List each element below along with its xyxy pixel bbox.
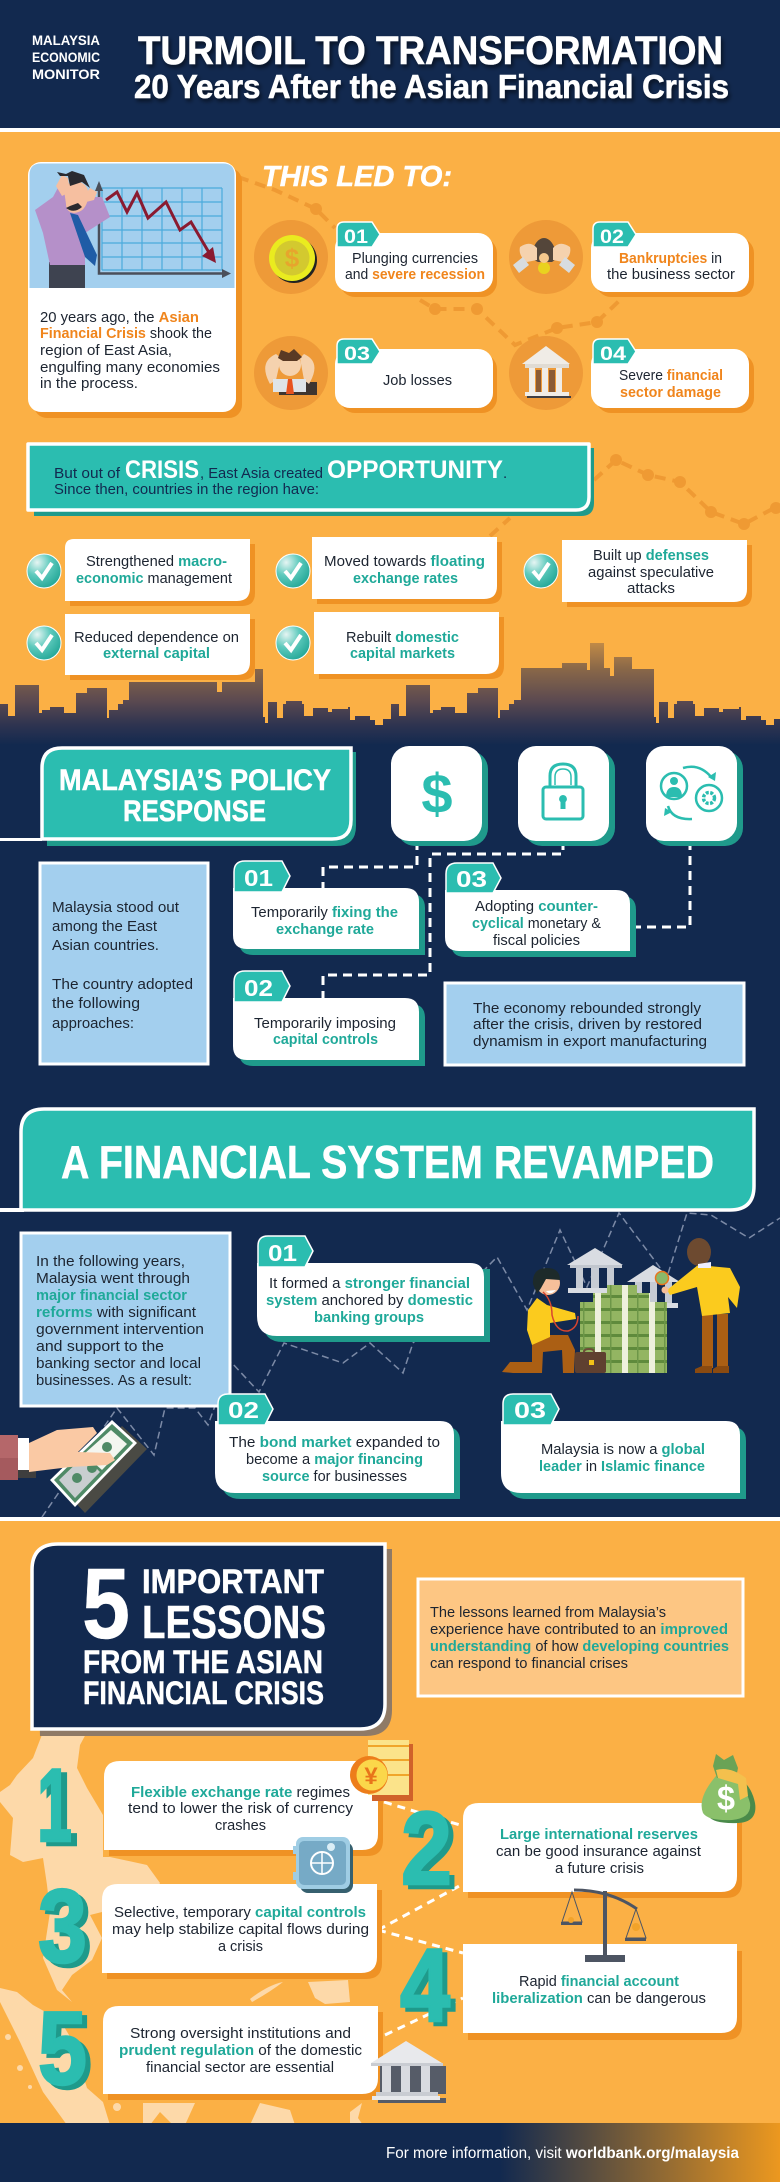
- header brand: Malaysia Economic Monitor: ECONOMIC: [32, 49, 100, 65]
- icon: yen coin and stacks: [350, 1740, 413, 1801]
- card 04: financial sector damage: sector damage: [620, 384, 721, 401]
- reforms blue box: [21, 1233, 230, 1406]
- tag 04: 04: [600, 344, 627, 365]
- intro blue box: Asian countries.: [52, 937, 159, 954]
- card 01: plunging currencies: [335, 222, 497, 297]
- reforms blue box: and support to the: [36, 1338, 164, 1355]
- lesson card 2: a future crisis: [555, 1860, 644, 1877]
- icon: safe: [293, 1837, 353, 1893]
- lesson card 3: Selective, temporary capital controls: [114, 1904, 366, 1921]
- card 01: stronger financial system: system anchored by domestic: [266, 1292, 473, 1309]
- icon: check: [27, 554, 61, 588]
- lesson card 5: [103, 2006, 383, 2100]
- standing banker: [656, 1238, 740, 1373]
- check card: floating exchange rates: [276, 537, 502, 604]
- card 02: bankruptcies: the business sector: [607, 266, 735, 283]
- icon: falling coin: $: [285, 243, 300, 273]
- reforms blue box: banking sector and local: [36, 1355, 201, 1372]
- heading: this led to: THIS LED TO:: [262, 161, 452, 193]
- card 02: bond market: The bond market expanded to: [229, 1434, 440, 1451]
- icon card: dollar: $: [421, 762, 453, 825]
- tag 02: [218, 1394, 273, 1425]
- card 04: financial sector damage: Severe financial: [619, 367, 723, 384]
- rebound blue box: dynamism in export manufacturing: [473, 1033, 707, 1050]
- reforms blue box: Malaysia went through: [36, 1270, 190, 1287]
- reforms blue box: In the following years,: [36, 1253, 185, 1270]
- icon: bank building: [371, 2041, 446, 2103]
- policy card 01: exchange rate: [276, 921, 374, 938]
- numeral 2: 2: [406, 1795, 457, 1911]
- intro blue box: the following: [52, 995, 140, 1012]
- header brand: Malaysia Economic Monitor: MONITOR: [32, 66, 100, 82]
- card 04: financial sector damage: [591, 339, 754, 413]
- policy card 02: capital controls: [273, 1031, 378, 1048]
- check card: defenses: [524, 540, 752, 607]
- panel text: [40, 309, 220, 392]
- check card: external capital: Reduced dependence on: [74, 629, 239, 646]
- card 01: stronger financial system: It formed a stronger financial: [269, 1275, 470, 1292]
- icon: check: [276, 626, 310, 660]
- icon: yen coin and stacks: ¥: [364, 1763, 378, 1790]
- heading: 5 important lessons: 5: [82, 1548, 130, 1660]
- tag 02: 02: [600, 227, 624, 248]
- connector dashes: [323, 841, 690, 998]
- card 01: plunging currencies: and severe recession: [345, 266, 485, 283]
- check card: macroeconomic management: economic management: [76, 570, 233, 587]
- intro blue box: among the East: [52, 918, 158, 935]
- title: [134, 29, 729, 105]
- card 02: bond market: become a major financing: [246, 1451, 423, 1468]
- heading: 5 important lessons: IMPORTANT: [142, 1563, 324, 1601]
- intro blue box: approaches:: [52, 1015, 134, 1032]
- check card: domestic capital markets: [276, 612, 504, 679]
- card 01: stronger financial system: [257, 1236, 490, 1342]
- check card: floating exchange rates: Moved towards floating: [324, 553, 485, 570]
- numeral 1: 1: [43, 1752, 78, 1868]
- intro blue box: [40, 863, 208, 1064]
- policy card 03: [445, 863, 636, 957]
- icon: check: [27, 626, 61, 660]
- card 03: job losses: [335, 339, 497, 413]
- kneeling banker: [502, 1268, 578, 1373]
- man: [49, 262, 85, 288]
- lessons intro box: The lessons learned from Malaysia’s: [430, 1604, 666, 1621]
- illustration: falling chart with worried man: [35, 171, 231, 288]
- icon: money bag: [702, 1754, 755, 1823]
- banner: crisis to opportunity: OPPORTUNITY: [327, 456, 503, 484]
- header band: [0, 0, 780, 128]
- card 02: bond market: [215, 1394, 460, 1499]
- check card: floating exchange rates: exchange rates: [353, 570, 458, 587]
- tag 04: [593, 339, 636, 365]
- briefcase: [575, 1349, 606, 1373]
- illustration: bankers examining money stack: [502, 1238, 740, 1373]
- lesson card 3: may help stabilize capital flows during: [112, 1921, 369, 1938]
- policy response heading: RESPONSE: [123, 795, 266, 828]
- check card: domestic capital markets: capital markets: [350, 645, 455, 662]
- tag 03: 03: [344, 344, 370, 365]
- lesson card 1: [104, 1761, 383, 1856]
- title: 20 Years After the Asian Financial Crisis: [134, 68, 729, 105]
- reforms blue box: reforms with significant: [36, 1304, 197, 1321]
- reforms blue box: businesses. As a result:: [36, 1372, 192, 1389]
- tag 02: 02: [244, 975, 273, 1001]
- orange background top section: [0, 132, 780, 745]
- lesson card 4: Rapid financial account: [519, 1973, 679, 1990]
- panel: crisis intro: [28, 162, 242, 418]
- icon: cracked bank: [509, 336, 583, 410]
- icon: stressed worker: [254, 336, 328, 410]
- lesson card 3: a crisis: [218, 1938, 263, 1955]
- lesson card 5: financial sector are essential: [146, 2059, 334, 2076]
- numeral 5: 5: [43, 1995, 92, 2111]
- lesson card 3: [102, 1884, 382, 1979]
- tag 02: 02: [228, 1397, 259, 1423]
- tag 03: 03: [456, 866, 487, 892]
- numeral 5: 5: [38, 1991, 87, 2107]
- lesson card 2: [463, 1803, 742, 1898]
- heading: 5 important lessons: FINANCIAL CRISIS: [83, 1675, 324, 1711]
- numeral 4: 4: [405, 1932, 455, 2048]
- panel text: Financial Crisis shook the: [40, 325, 212, 342]
- numeral 3: 3: [38, 1869, 87, 1985]
- skyline silhouette: [0, 643, 780, 745]
- navy section background: [0, 745, 780, 1517]
- lesson card 2: can be good insurance against: [496, 1843, 702, 1860]
- tag 01: [337, 222, 380, 248]
- card 03: job losses: Job losses: [383, 372, 452, 389]
- lesson card 1: crashes: [215, 1817, 266, 1834]
- panel text: 20 years ago, the Asian: [40, 309, 199, 326]
- tag 01: 01: [268, 1240, 297, 1266]
- policy card 03: cyclical monetary &: [472, 915, 601, 932]
- panel text: engulfing many economies: [40, 359, 220, 376]
- tag 01: [234, 861, 290, 892]
- reforms blue box: government intervention: [36, 1321, 204, 1338]
- policy card 01: [233, 861, 425, 955]
- intro blue box: Malaysia stood out: [52, 899, 180, 916]
- lesson card 2: Large international reserves: [500, 1826, 698, 1843]
- banner: crisis to opportunity: CRISIS: [125, 456, 199, 484]
- tag 03: 03: [514, 1397, 546, 1423]
- icon card: padlock: [518, 746, 615, 846]
- decorative dashed trend line in orange: [238, 177, 780, 536]
- money stack: [580, 1285, 667, 1373]
- heading: 5 important lessons: LESSONS: [142, 1596, 326, 1648]
- connector dashes for lessons: [378, 1802, 463, 2035]
- card 03: Islamic finance: [501, 1394, 746, 1499]
- tag 01: [258, 1236, 313, 1267]
- policy response heading: [0, 748, 356, 846]
- lessons intro box: [418, 1579, 743, 1696]
- card 01: plunging currencies: Plunging currencies: [352, 250, 478, 267]
- rebound blue box: after the crisis, driven by restored: [473, 1016, 702, 1033]
- check card: external capital: external capital: [103, 645, 210, 662]
- check card: macroeconomic management: [27, 539, 255, 606]
- icon: falling coin: [254, 220, 328, 294]
- numeral 2: 2: [401, 1791, 452, 1907]
- small bank left: [567, 1248, 623, 1293]
- orange lessons background: [0, 1521, 780, 2123]
- header brand: Malaysia Economic Monitor: [32, 32, 100, 82]
- card 03: Islamic finance: leader in Islamic finance: [539, 1458, 705, 1475]
- lessons intro box: can respond to financial crises: [430, 1655, 628, 1672]
- icon: money bag: $: [717, 1780, 735, 1818]
- tag 01: 01: [344, 227, 368, 248]
- background dashed trend chart: [42, 1213, 780, 1517]
- banner: crisis to opportunity: [28, 444, 594, 516]
- numeral 3: 3: [43, 1873, 92, 1989]
- numeral 1: [37, 1748, 78, 1868]
- tag 01: 01: [244, 865, 273, 891]
- card 01: stronger financial system: banking groups: [314, 1309, 424, 1326]
- title: TURMOIL TO TRANSFORMATION: [138, 29, 723, 73]
- lesson card 1: Flexible exchange rate regimes: [131, 1784, 350, 1801]
- map of Malaysia region: [0, 1732, 363, 2125]
- card 02: bankruptcies: Bankruptcies in: [619, 250, 722, 267]
- card 02: bond market: source for businesses: [262, 1468, 407, 1485]
- lesson card 5: Strong oversight institutions and: [130, 2025, 351, 2042]
- check card: macroeconomic management: Strengthened macro-: [86, 553, 227, 570]
- intro blue box: The country adopted: [52, 976, 193, 993]
- tag 03: [503, 1394, 559, 1425]
- icon card: dollar: [391, 746, 488, 846]
- banner: crisis to opportunity: , East Asia created: [200, 465, 323, 482]
- check card: defenses: Built up defenses: [593, 547, 709, 564]
- banner: crisis to opportunity: .: [503, 465, 507, 482]
- policy response heading: MALAYSIA’S POLICY: [59, 764, 331, 797]
- footer: [0, 2123, 780, 2182]
- card 02: bankruptcies: [591, 222, 754, 297]
- icon: tilted scale: [561, 1890, 646, 1962]
- lesson card 4: [463, 1944, 742, 2040]
- banner: crisis to opportunity: Since then, countries in the region have:: [54, 481, 319, 498]
- icon: check: [524, 554, 558, 588]
- policy card 03: fiscal policies: [493, 932, 580, 949]
- numeral 1: 1: [37, 1748, 72, 1864]
- policy card 01: Temporarily fixing the: [251, 904, 398, 921]
- heading banner: financial system revamped: [0, 1109, 754, 1212]
- check card: domestic capital markets: Rebuilt domestic: [346, 629, 459, 646]
- check card: defenses: against speculative: [588, 564, 714, 581]
- rebound blue box: [445, 983, 744, 1065]
- lesson card 4: liberalization can be dangerous: [492, 1990, 706, 2007]
- card 03: Islamic finance: Malaysia is now a global: [541, 1441, 705, 1458]
- lessons intro box: understanding of how developing countries: [430, 1638, 729, 1655]
- policy card 02: Temporarily imposing: [254, 1015, 396, 1032]
- check card: defenses: attacks: [627, 580, 675, 597]
- check card: external capital: [27, 614, 255, 680]
- lesson card 1: tend to lower the risk of currency: [128, 1800, 354, 1817]
- icon card: cycle of person and gear: [646, 746, 743, 846]
- lessons intro box: experience have contributed to an improved: [430, 1621, 728, 1638]
- icon: empty pocket: [509, 220, 583, 294]
- icon: check: [276, 554, 310, 588]
- policy card 03: Adopting counter-: [475, 898, 598, 915]
- tag 03: [446, 863, 501, 893]
- numeral 4: 4: [400, 1928, 450, 2044]
- tag 03: [337, 339, 380, 365]
- rebound blue box: The economy rebounded strongly: [473, 1000, 701, 1017]
- panel text: in the process.: [40, 375, 138, 392]
- footer: For more information, visit worldbank.org/malaysia: [386, 2145, 739, 2162]
- lesson card 5: prudent regulation of the domestic: [119, 2042, 363, 2059]
- tag 02: [593, 222, 636, 248]
- illustration: hand holding cash: [0, 1420, 147, 1513]
- banner: crisis to opportunity: But out of: [54, 465, 121, 482]
- panel text: region of East Asia,: [40, 342, 172, 359]
- policy card 02: [233, 971, 425, 1066]
- header brand: Malaysia Economic Monitor: MALAYSIA: [32, 32, 100, 48]
- heading: 5 important lessons: FROM THE ASIAN: [83, 1644, 323, 1680]
- heading: 5 important lessons: [32, 1544, 392, 1736]
- small bank right: [627, 1265, 680, 1308]
- reforms blue box: major financial sector: [36, 1287, 187, 1304]
- tag 02: [234, 971, 290, 1002]
